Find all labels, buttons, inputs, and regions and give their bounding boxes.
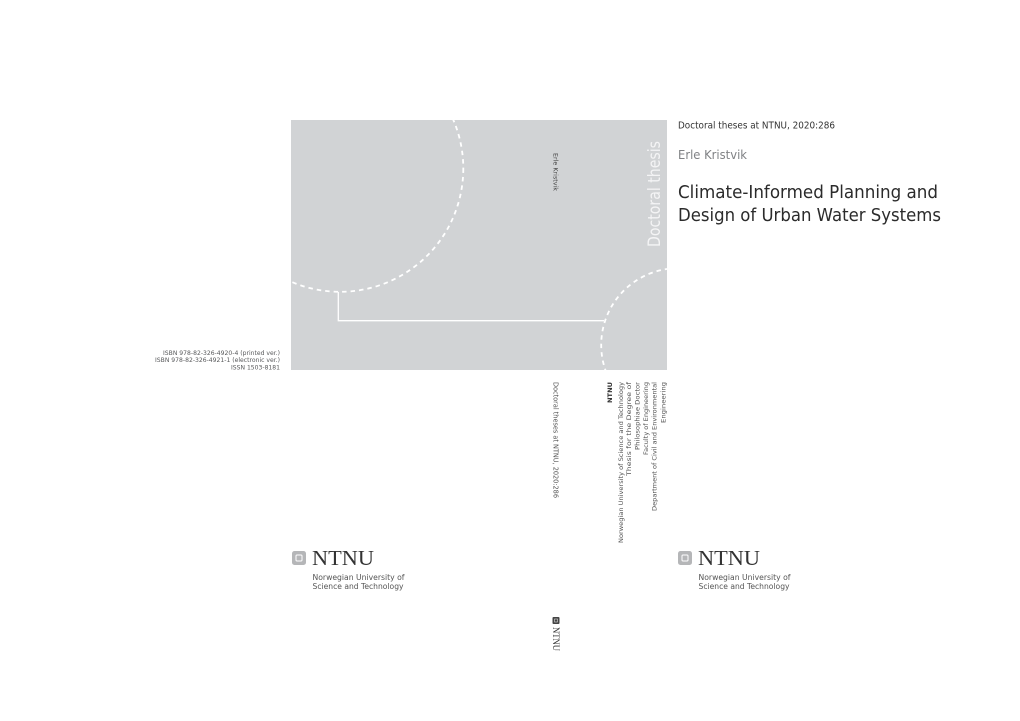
spine: institution block: NTNU <box>606 382 614 403</box>
spine: institution block <box>606 381 668 543</box>
ISBN block: ISBN 978-82-326-4921-1 (electronic ver.) <box>155 356 280 364</box>
logo: NTNU back cover: NTNU <box>312 546 374 570</box>
author name: Erle Kristvik <box>678 147 748 162</box>
logo: NTNU back cover <box>292 546 405 591</box>
logo: NTNU back cover: Science and Technology <box>312 582 404 591</box>
logo: NTNU front cover: NTNU <box>698 546 760 570</box>
spine: institution block: Philosophiae Doctor <box>634 382 642 450</box>
title: Climate-Informed Planning and <box>678 182 938 203</box>
spine label: Doctoral thesis: Doctoral thesis <box>645 141 664 247</box>
logo: NTNU front cover: Norwegian University of <box>698 573 791 582</box>
logo: NTNU on spine <box>550 617 560 651</box>
ISBN block: ISSN 1503-8181 <box>231 364 280 372</box>
spine label: author name: Erle Kristvik <box>552 153 560 191</box>
series number: Doctoral theses at NTNU, 2020:286 <box>678 120 835 132</box>
spine: institution block: Faculty of Engineering <box>642 382 650 455</box>
spine: institution block: Department of Civil and Environmental <box>650 382 658 511</box>
spine: institution block: Engineering <box>660 382 668 423</box>
title: Design of Urban Water Systems <box>678 205 941 226</box>
logo: NTNU back cover: Norwegian University of <box>312 573 405 582</box>
thesis cover spread <box>156 120 940 651</box>
ISBN block <box>155 349 280 372</box>
logo: NTNU front cover <box>678 546 791 591</box>
spine: institution block: Norwegian University of Science and Technology <box>617 382 625 543</box>
logo: NTNU on spine: NTNU <box>550 627 560 651</box>
spine: institution block: Thesis for the Degree of <box>625 381 633 477</box>
panel: grey cover block <box>291 120 667 370</box>
logo: NTNU front cover: Science and Technology <box>698 582 790 591</box>
ISBN block: ISBN 978-82-326-4920-4 (printed ver.) <box>163 349 280 357</box>
spine: series number: Doctoral theses at NTNU, 2020:286 <box>552 382 560 498</box>
title <box>678 182 941 226</box>
